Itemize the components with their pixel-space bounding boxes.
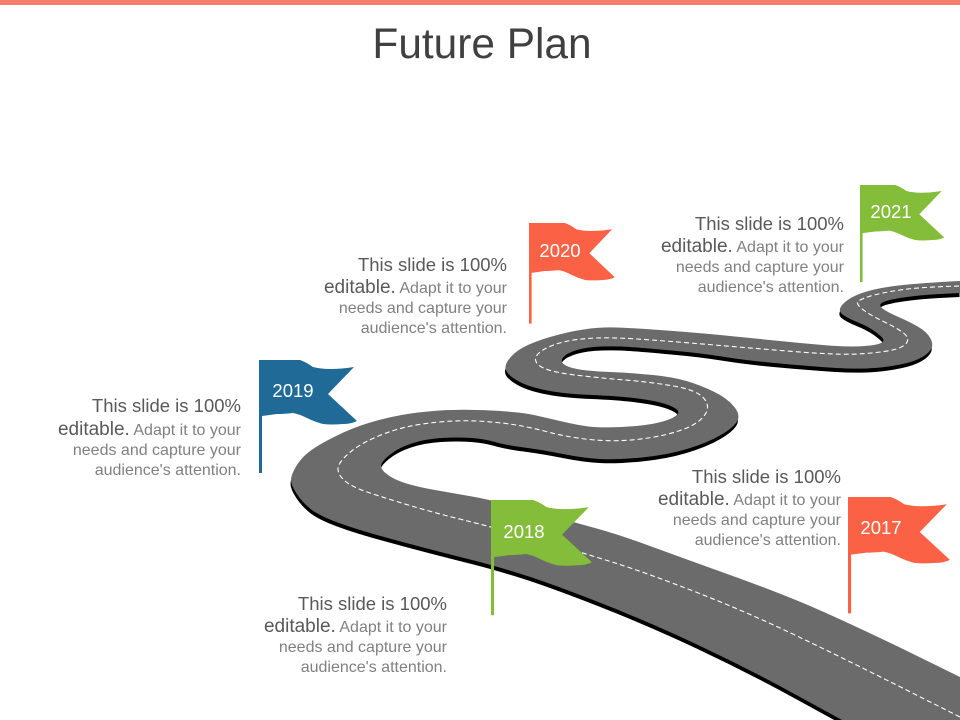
road centre line — [338, 286, 960, 717]
text block: 2020: This slide is 100% — [358, 254, 507, 275]
flag: 2017 — [848, 497, 950, 613]
text block: 2021: editable. Adapt it to your — [661, 236, 845, 257]
text block: 2021: This slide is 100% — [695, 213, 844, 234]
winding road — [290, 281, 960, 720]
text block: 2020 — [324, 254, 508, 337]
text block: 2021 — [661, 213, 845, 296]
top accent bar — [0, 0, 960, 5]
text block: 2018: audience's attention. — [301, 659, 447, 676]
text block: 2018: needs and capture your — [279, 639, 448, 656]
text block: 2020: audience's attention. — [361, 320, 507, 337]
text block: 2017 — [658, 466, 842, 549]
text block: 2018: editable. Adapt it to your — [264, 616, 448, 637]
text block: 2019: needs and capture your — [73, 442, 242, 459]
title: Future Plan — [372, 20, 592, 67]
flag: 2018 — [491, 500, 592, 615]
text block: 2018: This slide is 100% — [298, 593, 447, 614]
text block: 2020: editable. Adapt it to your — [324, 277, 508, 298]
text block: 2019 — [58, 395, 242, 479]
text block: 2017: audience's attention. — [695, 532, 841, 549]
flag: 2021 — [860, 185, 944, 282]
text block: 2019: audience's attention. — [95, 462, 241, 479]
text block: 2021: needs and capture your — [676, 259, 845, 276]
flag: 2017: 2017 — [860, 517, 902, 538]
text block: 2018 — [264, 593, 448, 676]
text block: 2020: needs and capture your — [339, 300, 508, 317]
text block: 2017: needs and capture your — [673, 512, 842, 529]
flag: 2018: 2018 — [503, 521, 545, 542]
text block: 2019: editable. Adapt it to your — [58, 419, 242, 440]
flag: 2020: 2020 — [539, 240, 581, 261]
flag: 2019: 2019 — [272, 380, 314, 401]
text block: 2019: This slide is 100% — [92, 395, 241, 416]
flag: 2019 — [259, 360, 357, 473]
road shadow — [290, 285, 960, 720]
text block: 2017: editable. Adapt it to your — [658, 489, 842, 510]
flag: 2020 — [529, 223, 615, 324]
flag: 2021: 2021 — [870, 201, 912, 222]
text block: 2017: This slide is 100% — [692, 466, 841, 487]
road surface — [291, 281, 960, 720]
text block: 2021: audience's attention. — [698, 279, 844, 296]
